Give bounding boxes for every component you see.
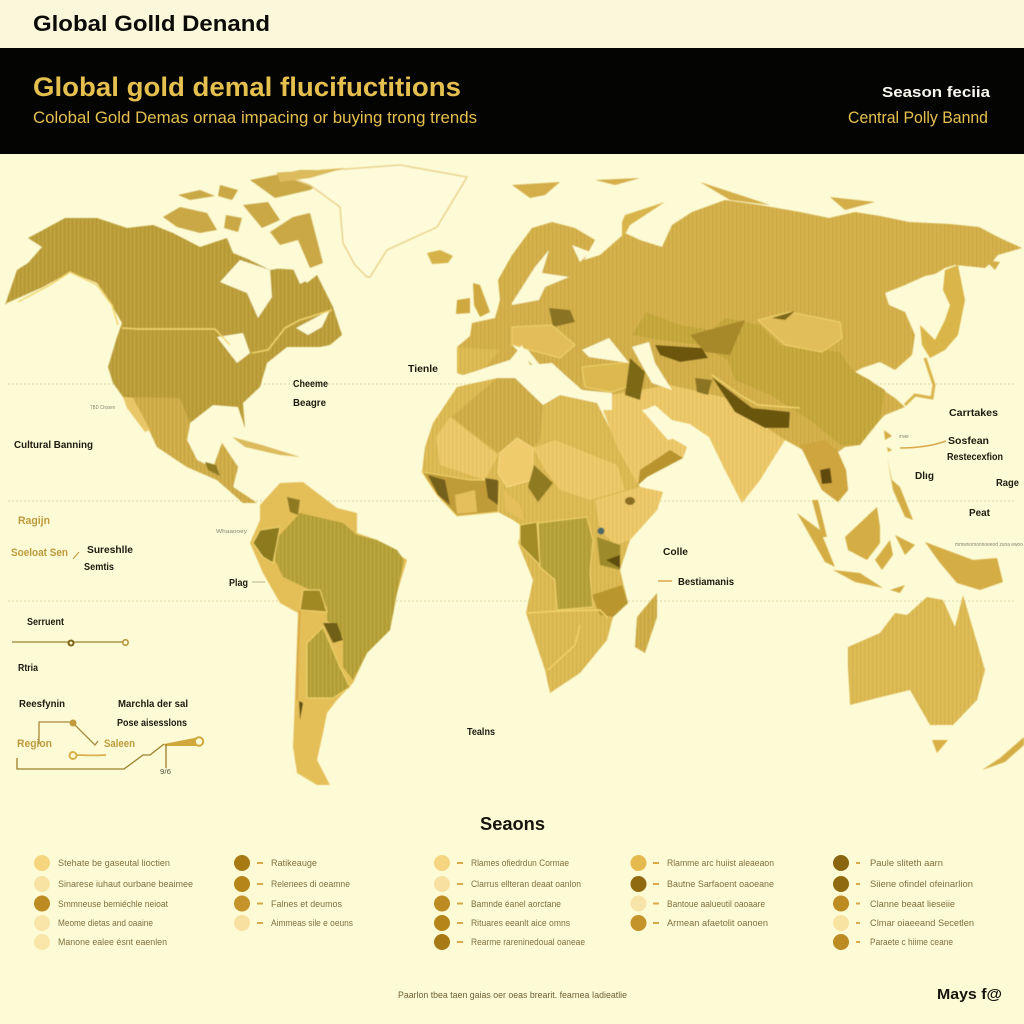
Arctic islands xyxy=(512,178,1000,270)
label: Region: Region xyxy=(17,738,52,750)
Sulawesi and small islands xyxy=(875,535,915,593)
White Sea xyxy=(572,245,590,262)
Baja California xyxy=(123,397,150,432)
Sahel West xyxy=(436,417,498,480)
Mongolia xyxy=(758,312,842,352)
Aegean and Adriatic xyxy=(512,345,550,378)
Novaya Zemlya xyxy=(622,202,665,240)
small note Oceania: mmwnomonnoeeod zuna ewoo xyxy=(955,542,1023,548)
West Africa dark patches xyxy=(428,475,498,505)
legend column 5 xyxy=(833,855,974,950)
Hudson Bay north channel xyxy=(250,250,308,284)
Taiwan area xyxy=(884,430,892,452)
label: Rage: Rage xyxy=(996,477,1019,489)
label: Atlantic: Tienle xyxy=(408,363,438,375)
borders xyxy=(18,272,332,353)
Sahara xyxy=(452,378,543,453)
legend column 4: Bautne Sarfaoent oaoeane xyxy=(667,879,774,889)
label: Cheeme: Cheeme xyxy=(293,378,328,390)
Venezuela patch xyxy=(287,497,300,515)
legend column 2: Aimmeas sile e oeuns xyxy=(271,918,353,928)
timeline slider xyxy=(12,640,128,646)
Iceland xyxy=(427,250,453,264)
Great Lakes xyxy=(217,333,250,363)
Mongolia dark xyxy=(772,311,795,320)
Greenland xyxy=(277,165,467,277)
Kamchatka and Japan xyxy=(920,265,965,358)
label: Dlig: Dlıg xyxy=(915,470,934,482)
Himalaya dark band xyxy=(712,377,790,428)
Border lines xyxy=(527,610,608,670)
Himalaya highlight xyxy=(712,375,800,408)
Argentina north xyxy=(307,627,350,698)
leader: Sosfean xyxy=(900,441,946,448)
label: Serruent: Serruent xyxy=(27,616,64,628)
legend heading: Seaons xyxy=(480,814,545,834)
Horn of Africa xyxy=(595,487,663,545)
Japan lower xyxy=(905,358,934,405)
Madagascar xyxy=(635,593,657,653)
Arctic islands xyxy=(163,170,343,268)
continent: Eurasia xyxy=(457,178,1022,503)
Mozambique xyxy=(592,585,628,617)
Gulf of St Lawrence xyxy=(296,310,330,335)
label: Marchla der sal: Marchla der sal xyxy=(118,698,188,710)
Baltic Sea xyxy=(512,250,569,305)
SE Asia xyxy=(800,440,848,502)
small note South America: Whaaooey xyxy=(216,529,248,535)
Mexico xyxy=(123,397,257,503)
footer note: Paarlon tbea taen gaias oer oeas brearit. fearnea Iadieatlie xyxy=(398,990,627,1000)
legend column 1: Stehate be gaseutal lioctien xyxy=(58,858,170,868)
tick mark xyxy=(73,552,79,559)
legend column 4: Rlamme arc huiist aleaeaon xyxy=(667,858,774,868)
connector node xyxy=(70,720,76,726)
legend column 3: Bamnde éanel aorctane xyxy=(471,899,561,909)
legend column 3: Rearme rareninedoual oaneae xyxy=(471,937,585,947)
legend column 3: Clarrus ellteran deaat oanlon xyxy=(471,879,581,889)
label: Sosfean: Sosfean xyxy=(948,435,989,447)
Peru dark xyxy=(253,527,280,563)
label: Semtis: Semtis xyxy=(84,561,114,573)
West Africa medium patches xyxy=(455,490,525,522)
West Africa xyxy=(422,472,500,516)
label: Cultural Banning: Cultural Banning xyxy=(14,439,93,451)
header banner xyxy=(0,48,1024,154)
Philippines xyxy=(887,457,913,520)
continent: North America xyxy=(5,165,467,503)
legend xyxy=(34,855,974,950)
Congo xyxy=(538,517,593,610)
Arabia south xyxy=(638,450,683,485)
left annotation diagram xyxy=(12,616,203,776)
Cuba xyxy=(232,437,300,457)
legend column 4 xyxy=(630,855,774,931)
legend column 5: Paule sliteth aarn xyxy=(870,858,943,868)
Amazon xyxy=(275,513,404,680)
label: Peat: Peat xyxy=(969,507,990,519)
top band xyxy=(0,0,1024,48)
Patagonia strokes xyxy=(297,610,300,700)
map callout labels xyxy=(11,363,1023,738)
label: Plag with leader: Plag xyxy=(229,577,248,589)
legend column 2 xyxy=(234,855,353,931)
dark Central America spots xyxy=(205,462,220,476)
continent: Australia xyxy=(848,595,985,753)
New Zealand xyxy=(982,737,1024,770)
label: Sureshlle: Sureshlle xyxy=(87,544,133,556)
legend column 5: Clmar oiaeeand Secetlen xyxy=(870,918,974,928)
top heading: Global Golld Denand xyxy=(33,11,270,36)
Middle East light xyxy=(610,385,785,503)
legend column 1 xyxy=(34,855,193,950)
legend column 1: Meome dietas and oaaine xyxy=(58,918,153,928)
legend column 1: Manone ealee ésnt eaenlen xyxy=(58,937,167,947)
Arabia xyxy=(603,408,687,485)
label: Soeloat Sen: Soeloat Sen xyxy=(11,547,68,559)
islands: Southeast Asia and Oceania xyxy=(797,430,1024,770)
Greenland north coast xyxy=(277,168,345,182)
legend column 4: Armean afaetolit oanoen xyxy=(667,918,768,928)
small note 9/6: 9/6 xyxy=(160,769,171,776)
Caspian Sea xyxy=(632,342,672,390)
banner subtitle: Colobal Gold Demas ornaa impacing or buying trong trends xyxy=(33,108,477,127)
legend column 5: Paraete c hiime ceane xyxy=(870,937,953,947)
Horn spot xyxy=(625,497,635,505)
Eastern Europe dark xyxy=(549,308,575,327)
Persian Gulf xyxy=(642,408,675,440)
Java xyxy=(833,570,883,588)
label: Restecexfion: Restecexfion xyxy=(947,451,1003,463)
continent: Africa xyxy=(422,378,663,693)
East Africa dark xyxy=(606,555,620,568)
Balkans light xyxy=(512,325,575,358)
connector: region path xyxy=(39,722,98,745)
New Guinea xyxy=(925,542,1003,590)
Caucasus dark xyxy=(625,358,645,400)
label: Rtria: Rtria xyxy=(18,662,38,674)
leader: Bestiamanis xyxy=(658,580,672,582)
Hudson Bay xyxy=(220,260,272,318)
small note ne: ne xyxy=(899,434,909,440)
legend column 2: Ratikeauge xyxy=(271,858,317,868)
Tanzania xyxy=(597,537,620,570)
legend column 1: Sinarese iuhaut ourbane beaimee xyxy=(58,879,193,889)
legend column 3: Rituares eeanlt aice omns xyxy=(471,918,570,928)
label: Colle: Colle xyxy=(663,546,688,558)
legend column 1: Smmneuse bemiéchle neioat xyxy=(58,899,168,909)
Central Asia dark band xyxy=(655,345,708,362)
Tasmania xyxy=(932,740,948,753)
label: Pose aisesslons: Pose aisesslons xyxy=(117,717,187,729)
leader: Plag xyxy=(252,581,265,583)
Bolivia xyxy=(300,590,327,612)
label: Bestiamanis: Bestiamanis xyxy=(678,576,734,588)
Mediterranean xyxy=(463,345,612,410)
label: Saleen: Saleen xyxy=(104,738,135,750)
Sudan xyxy=(533,440,625,500)
Afghanistan patches xyxy=(695,378,712,395)
footer source mark: Mays f@ xyxy=(937,986,1002,1003)
connector: rising line xyxy=(17,737,203,769)
Central Asia medium band xyxy=(690,320,745,355)
Chad xyxy=(498,438,533,487)
banner title: Global gold demal flucifuctitions xyxy=(33,72,461,102)
continent: South America xyxy=(250,482,407,785)
label: Reesfynin: Reesfynin xyxy=(19,698,65,710)
Dark central patch xyxy=(528,465,553,502)
legend column 2: Relenees di oeamne xyxy=(271,879,350,889)
SE Asia dark xyxy=(820,468,832,484)
Paraguay xyxy=(323,623,343,643)
legend column 5: Siiene ofindel ofeinarlion xyxy=(870,879,973,889)
connector: pin with tail xyxy=(70,752,106,759)
legend column 3 xyxy=(434,855,585,950)
Chile dark xyxy=(299,701,303,720)
banner right sublabel: Central Polly Bannd xyxy=(848,109,988,127)
label: Ragijn: Ragijn xyxy=(18,515,50,527)
Gabon xyxy=(520,522,540,565)
label: Carrtakes: Carrtakes xyxy=(949,407,998,419)
Malay Peninsula xyxy=(812,500,827,537)
label: Tealns: Tealns xyxy=(467,726,495,738)
label: Beagre: Beagre xyxy=(293,397,326,409)
legend column 5: Clanne beaat lieseiie xyxy=(870,899,955,909)
legend column 2: Falnes et deumos xyxy=(271,899,342,909)
Iberia xyxy=(457,347,500,375)
legend column 3: Rlames ofiedrdun Cormae xyxy=(471,858,569,868)
banner right label: Season feciia xyxy=(882,85,991,101)
Black Sea xyxy=(582,338,629,363)
British Isles xyxy=(456,283,490,317)
Central Asia olive xyxy=(632,312,885,445)
Sumatra xyxy=(797,513,835,567)
Anatolia xyxy=(582,362,640,392)
world map xyxy=(5,165,1024,785)
Borneo xyxy=(845,507,880,560)
Lake xyxy=(598,528,604,534)
small note west: TBD Chosen xyxy=(90,405,115,411)
legend column 4: Bantoue aalueutil oaoaare xyxy=(667,899,765,909)
